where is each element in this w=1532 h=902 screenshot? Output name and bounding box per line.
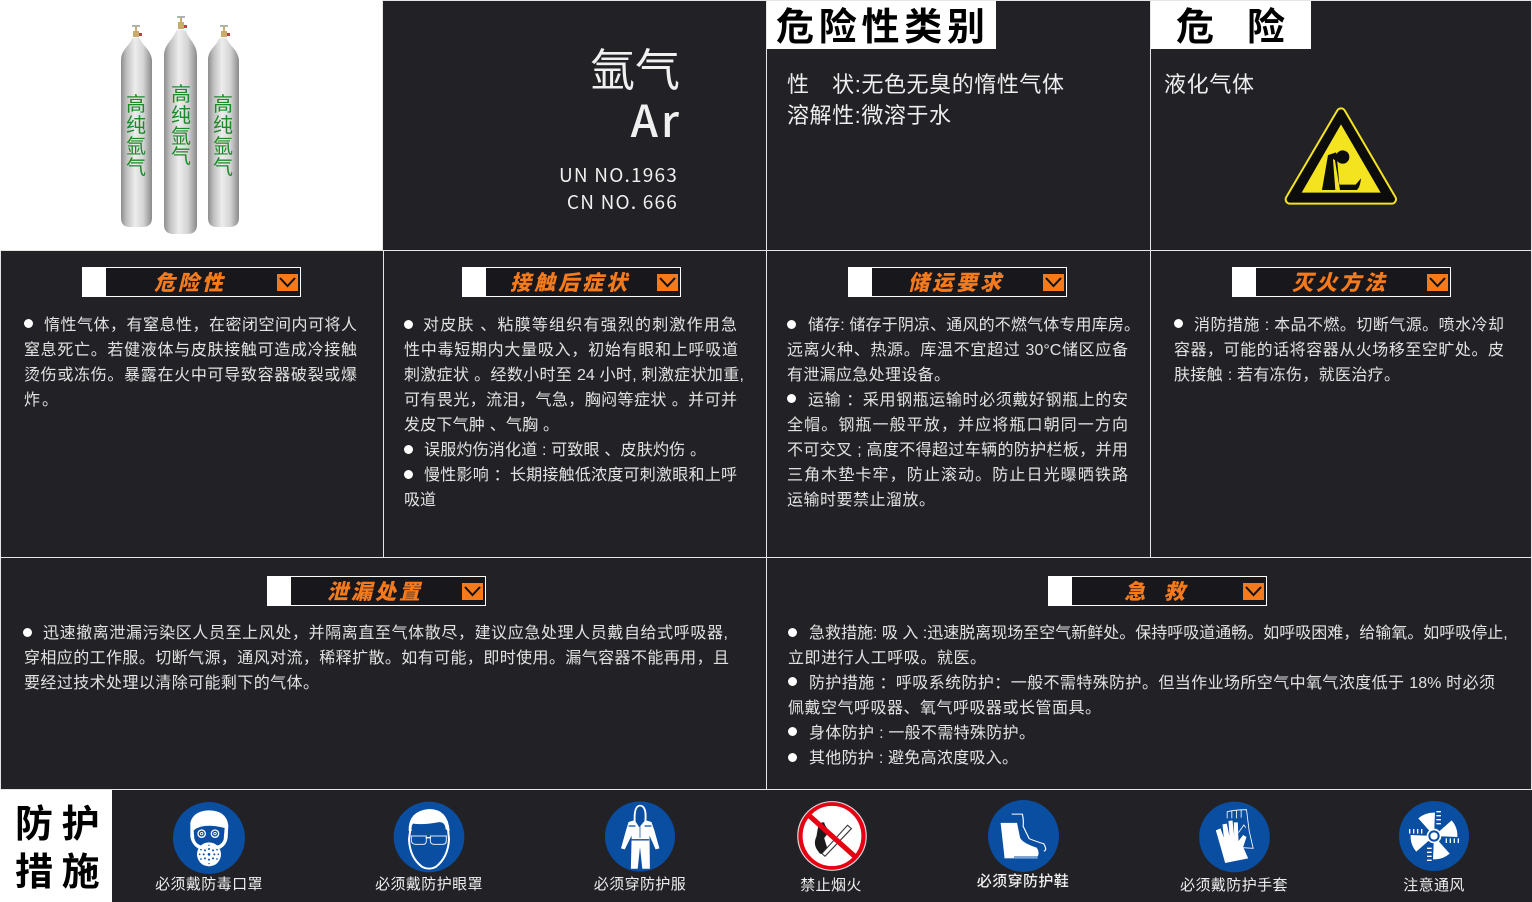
label: protective gloves: 必须戴防护手套: [1180, 874, 1288, 895]
panel: symptoms after contact: [404, 267, 744, 509]
body text: storage: 有泄漏应急处理设备。: [787, 367, 950, 384]
label: protective clothing: 必须穿防护服: [594, 873, 686, 894]
body text: symptoms: 吸道: [404, 492, 436, 509]
header bar: firefighting: 灭火方法: [1290, 267, 1394, 297]
body text: storage: 全帽。钢瓶一般平放，并应将瓶口朝同一方向: [787, 417, 1128, 434]
icon: protective gloves: [1199, 802, 1270, 872]
name: argon: 氩气: [590, 34, 680, 99]
text: properties: [787, 72, 1064, 128]
body text: symptoms: 慢性影响 ：长期接触低浓度可刺激眼和上呼: [424, 467, 737, 484]
body text: hazards: 惰性气体，有窒息性，在密闭空间内可将人: [44, 317, 357, 334]
icon: gas mask: [173, 802, 245, 874]
body text: first aid: 其他防护 : 避免高浓度吸入。: [809, 750, 1018, 767]
body text: storage: 运输时要禁止溜放。: [787, 492, 935, 509]
header bar: storage: [848, 267, 1067, 297]
header bar: leak: [267, 576, 486, 606]
body text: symptoms: 性中毒短期内大量吸入，初始有眼和上呼吸道: [404, 342, 738, 359]
label: no fire: 禁止烟火: [800, 874, 862, 895]
body text: symptoms: [404, 316, 744, 509]
body text: storage: 储存: 储存于阴凉、通风的不燃气体专用库房。: [808, 317, 1140, 334]
text: properties: 性 状:无色无臭的惰性气体: [787, 72, 1064, 97]
body text: symptoms: 对皮肤 、粘膜等组织有强烈的刺激作用急: [423, 317, 737, 334]
heading: protective measures: 措 施: [15, 841, 100, 896]
panel: cylinder image: [0, 0, 382, 250]
body text: leak: 穿相应的工作服。切断气源，通风对流，稀释扩散。如有可能，即时使用。漏气容器不能再用，且: [24, 650, 729, 667]
icon: ventilation fan: [1399, 801, 1469, 871]
body text: firefighting: 肤接触 : 若有冻伤，就医治疗。: [1174, 367, 1400, 384]
header bar: first aid: [1048, 576, 1267, 606]
panel: first aid: [788, 576, 1508, 767]
panel: cylinder image: 气: [213, 151, 233, 180]
body text: symptoms: 可有畏光，流泪，气急，胸闷等症状 。并可并: [404, 392, 737, 409]
body text: firefighting: [1174, 316, 1504, 384]
label: ventilation: 注意通风: [1403, 874, 1465, 895]
body text: hazards: 炸。: [24, 392, 58, 409]
body text: storage: 运输 ：采用钢瓶运输时必须戴好钢瓶上的安: [808, 392, 1128, 409]
panel: cylinder image: 气: [171, 140, 191, 169]
panel: cylinder image: 氩: [126, 130, 146, 159]
body text: storage: [787, 316, 1140, 509]
body text: storage: 远离火种、热源。库温不宜超过 30°C储区应备: [787, 342, 1128, 359]
label: safety boots: 必须穿防护鞋: [977, 870, 1069, 891]
heading: danger: [1151, 1, 1311, 49]
body text: firefighting: 消防措施 : 本品不燃。切断气源。喷水冷却: [1194, 317, 1504, 334]
body text: first aid: 急救措施: 吸 入 :迅速脱离现场至空气新鲜处。保持呼吸道通畅。如呼吸困难，给输氧。如呼吸停止,: [809, 625, 1508, 642]
header bar: first aid: 急 救: [1122, 576, 1194, 606]
panel: cylinder image: 高: [213, 88, 233, 117]
body text: leak: [23, 624, 729, 692]
panel: firefighting: [1174, 267, 1504, 384]
body text: first aid: 身体防护 : 一般不需特殊防护。: [809, 725, 1035, 742]
body text: storage: 不可交叉 ; 高度不得超过车辆的防护栏板，并用: [787, 442, 1128, 459]
text: liquefied gas: 液化气体: [1164, 72, 1254, 97]
body text: first aid: [788, 624, 1508, 767]
header bar: hazards: [82, 267, 301, 297]
heading: protective measures: 防 护: [15, 793, 100, 848]
panel: cylinder image: 氩: [171, 120, 191, 149]
icon: no fire: [797, 801, 867, 871]
body text: leak: 要经过技术处理以清除可能剩下的气体。: [24, 675, 319, 692]
UN number: UN NO.1963: [559, 161, 678, 188]
text: properties: 溶解性:微溶于水: [787, 103, 951, 128]
panel: cylinder image: 纯: [213, 109, 233, 138]
body text: hazards: [24, 316, 357, 409]
body text: leak: 迅速撤离泄漏污染区人员至上风处，并隔离直至气体散尽，建议应急处理人员戴自给式呼吸器,: [43, 625, 728, 642]
panel: cylinder image: 氩: [213, 130, 233, 159]
heading: protective measures: [0, 790, 112, 902]
CN number: CN NO. 666: [567, 188, 678, 215]
icon: asphyxiation warning triangle: [1284, 107, 1397, 205]
panel: substance name and numbers: [559, 34, 682, 215]
body text: hazards: 窒息死亡。若健液体与皮肤接触可造成冷接触: [24, 342, 357, 359]
body text: hazards: 烫伤或冻伤。暴露在火中可导致容器破裂或爆: [24, 367, 357, 384]
panel: hazards: [24, 267, 357, 409]
header bar: symptoms: 接触后症状: [508, 267, 636, 297]
panel: leak handling: [23, 576, 729, 692]
header bar: firefighting: [1232, 267, 1451, 297]
header bar: hazards: 危险性: [152, 267, 232, 297]
header bar: storage: 储运要求: [906, 267, 1010, 297]
body text: first aid: 立即进行人工呼吸。就医。: [788, 650, 986, 667]
label: gas mask: 必须戴防毒口罩: [155, 873, 263, 894]
header bar: leak: 泄漏处置: [325, 576, 429, 606]
panel: storage and transport: [787, 267, 1140, 509]
body text: symptoms: 发皮下气肿 、气胸 。: [404, 417, 559, 434]
header bar: symptoms: [462, 267, 681, 297]
icon: safety boots: [988, 800, 1059, 872]
body text: firefighting: 容器，可能的话将容器从火场移至空旷处。皮: [1174, 342, 1504, 359]
symbol: Ar: Ar: [631, 86, 682, 150]
body text: first aid: 佩戴空气呼吸器、氧气呼吸器或长管面具。: [788, 700, 1101, 717]
label: goggles: 必须戴防护眼罩: [375, 873, 483, 894]
body text: first aid: 防护措施 ：呼吸系统防护：一般不需特殊防护。但当作业场所空气中氧气浓度低于 18% 时必须: [809, 675, 1495, 692]
panel: cylinder image: 纯: [171, 99, 191, 128]
body text: symptoms: 刺激症状 。经数小时至 24 小时, 刺激症状加重,: [404, 367, 744, 384]
icon: protective clothing: [605, 801, 675, 872]
panel: cylinder image: 高: [126, 88, 146, 117]
body text: symptoms: 误服灼伤消化道 : 可致眼 、皮肤灼伤 。: [424, 442, 706, 459]
panel: cylinder image: 纯: [126, 109, 146, 138]
icon: goggles: [394, 802, 464, 872]
panel: cylinder image: 气: [126, 151, 146, 180]
panel: cylinder image: 高: [171, 78, 191, 107]
body text: storage: 三角木垫卡牢，防止滚动。防止日光曝晒铁路: [787, 467, 1128, 484]
